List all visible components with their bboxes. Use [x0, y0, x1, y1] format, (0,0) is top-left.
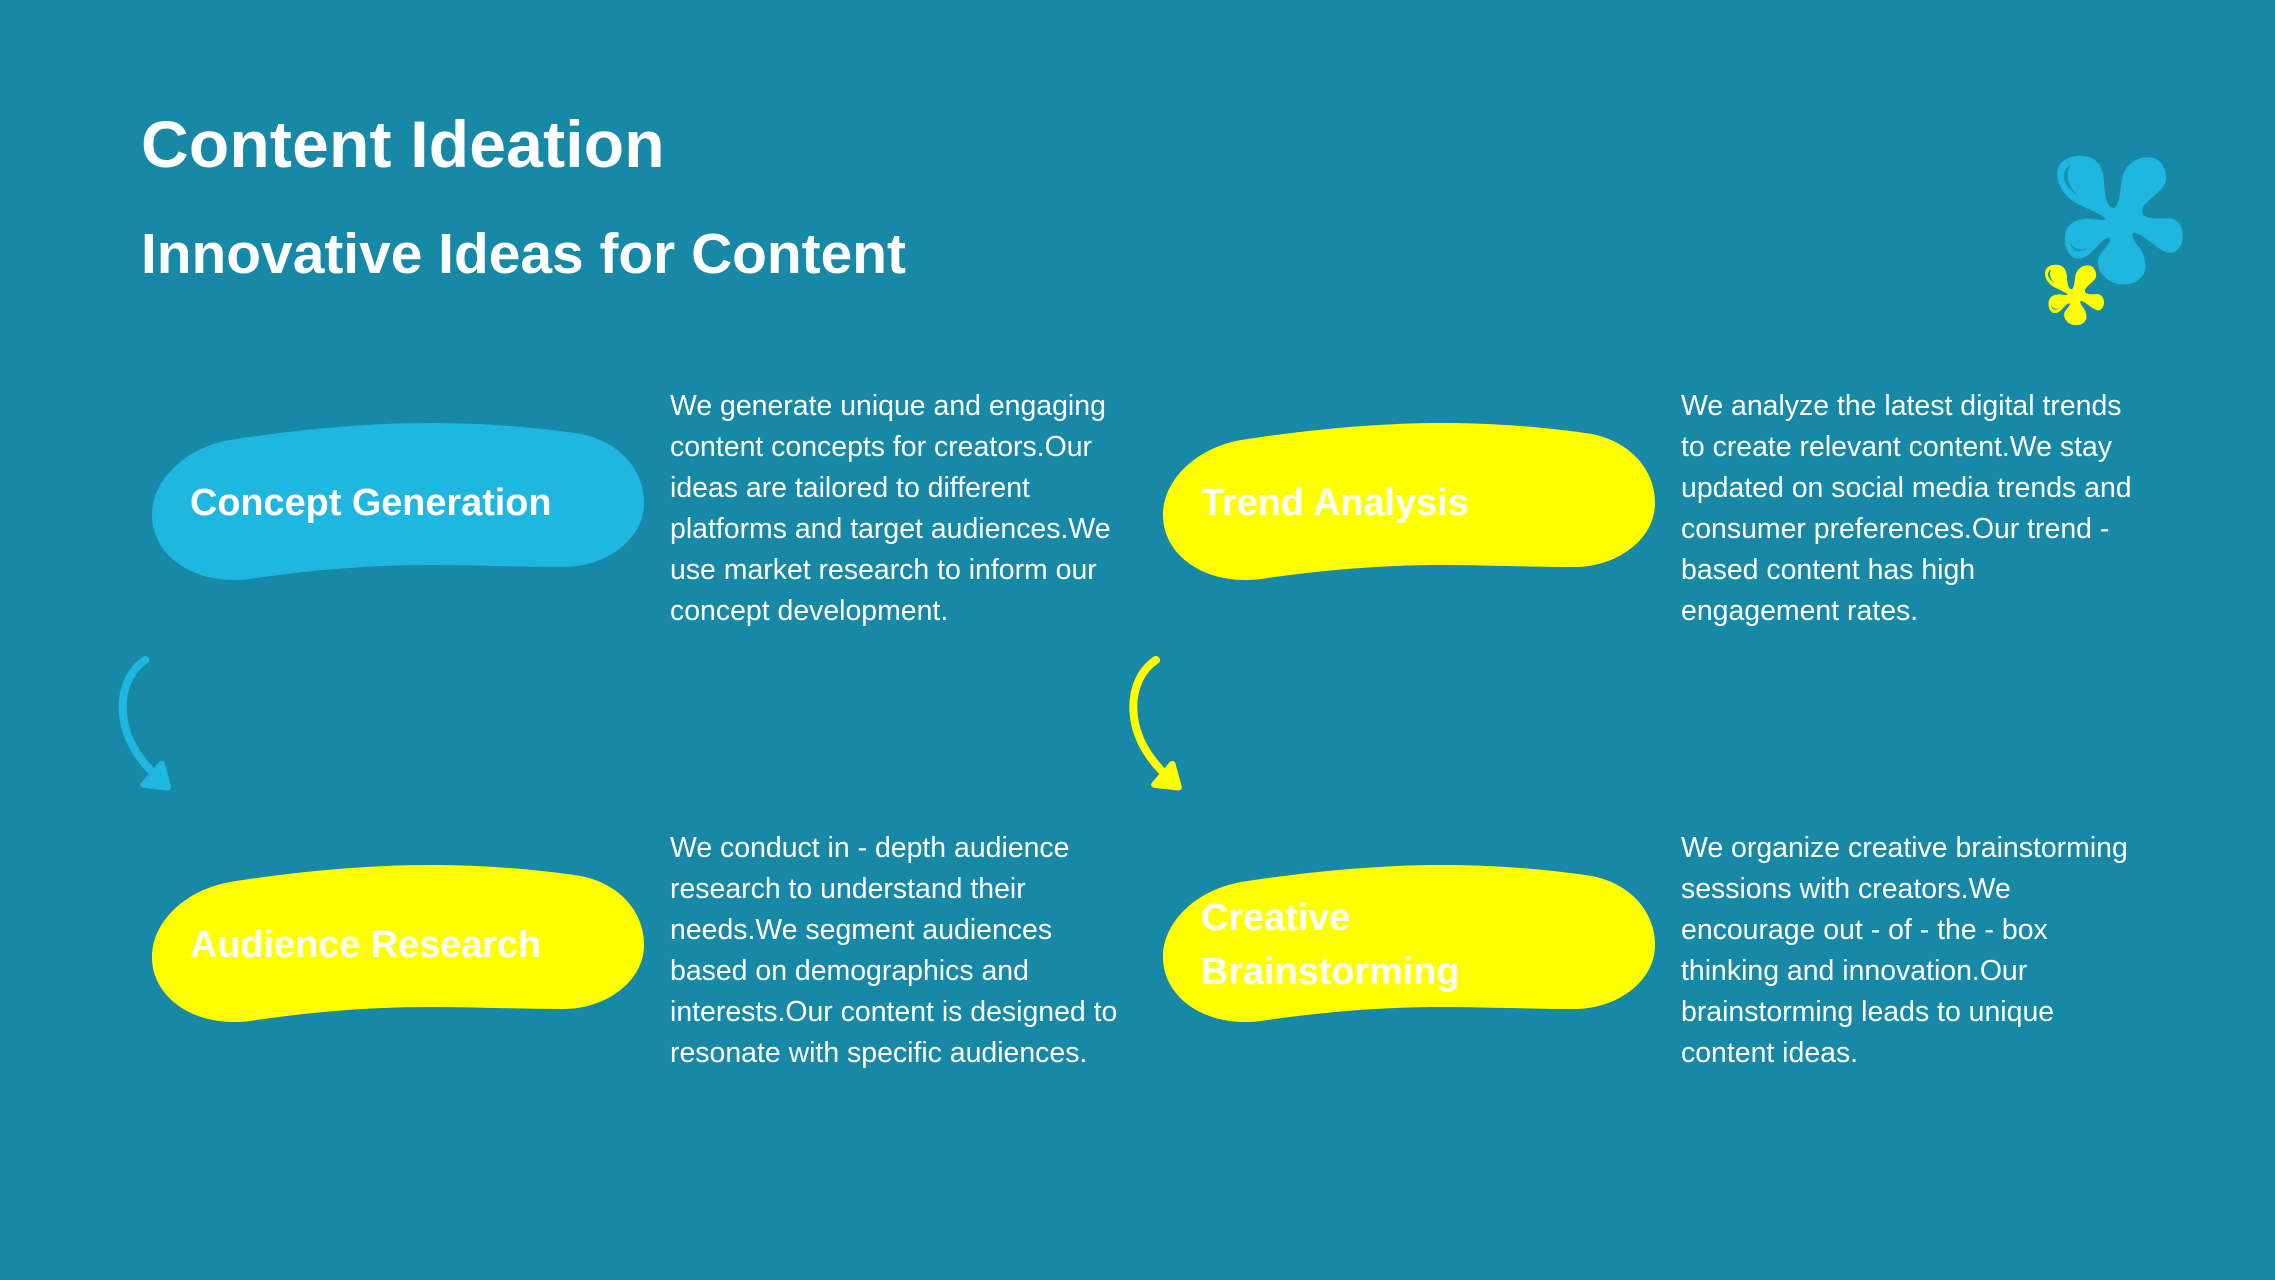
text block: Audience Research: resonate with specific audiences. — [670, 1037, 1087, 1069]
subtitle: Innovative Ideas for Content — [141, 222, 906, 286]
text block: Audience Research: interests.Our content is designed to — [670, 996, 1117, 1028]
icon: splat decoration — [2044, 156, 2183, 326]
text block: Trend Analysis: to create relevant content.We stay — [1681, 431, 2112, 463]
text block: Creative Brainstorming: We organize creative brainstorming — [1681, 832, 2128, 864]
arrow: blue curved — [118, 656, 172, 790]
text block: Creative Brainstorming — [1681, 832, 2128, 1069]
text block: Concept Generation: ideas are tailored to different — [670, 472, 1030, 504]
text block: Concept Generation: concept development. — [670, 595, 948, 627]
panel: Concept Generation label: Concept Generation — [190, 482, 552, 524]
text block: Trend Analysis: We analyze the latest digital trends — [1681, 390, 2122, 422]
text block: Audience Research: We conduct in - depth audience — [670, 832, 1069, 864]
panel: Creative Brainstorming label — [1163, 865, 1655, 1022]
text block: Concept Generation: platforms and target audiences.We — [670, 513, 1111, 545]
text block: Audience Research: research to understand their — [670, 873, 1026, 905]
panel: Concept Generation label — [152, 423, 644, 580]
text block: Concept Generation — [670, 390, 1111, 627]
panel: Audience Research label — [152, 865, 644, 1022]
panel: Trend Analysis label — [1163, 423, 1655, 580]
text block: Trend Analysis: consumer preferences.Our trend - — [1681, 513, 2109, 545]
text block: Audience Research — [670, 832, 1117, 1069]
text block: Trend Analysis: engagement rates. — [1681, 595, 1918, 627]
text block: Audience Research: needs.We segment audiences — [670, 914, 1052, 946]
panel: Audience Research label: Audience Research — [190, 924, 541, 966]
panel: Creative Brainstorming label: Brainstorming — [1201, 951, 1460, 993]
text block: Creative Brainstorming: brainstorming leads to unique — [1681, 996, 2054, 1028]
text block: Creative Brainstorming: sessions with creators.We — [1681, 873, 2011, 905]
panel: Creative Brainstorming label: Creative — [1201, 897, 1350, 939]
text block: Creative Brainstorming: content ideas. — [1681, 1037, 1858, 1069]
text block: Creative Brainstorming: encourage out - of - the - box — [1681, 914, 2048, 946]
text block: Trend Analysis: updated on social media trends and — [1681, 472, 2132, 504]
panel: Trend Analysis label: Trend Analysis — [1201, 482, 1469, 524]
arrow: yellow curved — [1129, 656, 1182, 790]
title: Content Ideation — [141, 107, 665, 181]
text block: Trend Analysis: based content has high — [1681, 554, 1975, 586]
text block: Creative Brainstorming: thinking and innovation.Our — [1681, 955, 2027, 987]
text block: Concept Generation: use market research to inform our — [670, 554, 1097, 586]
text block: Concept Generation: content concepts for creators.Our — [670, 431, 1092, 463]
text block: Trend Analysis — [1681, 390, 2132, 627]
text block: Audience Research: based on demographics and — [670, 955, 1029, 987]
text block: Concept Generation: We generate unique and engaging — [670, 390, 1106, 422]
